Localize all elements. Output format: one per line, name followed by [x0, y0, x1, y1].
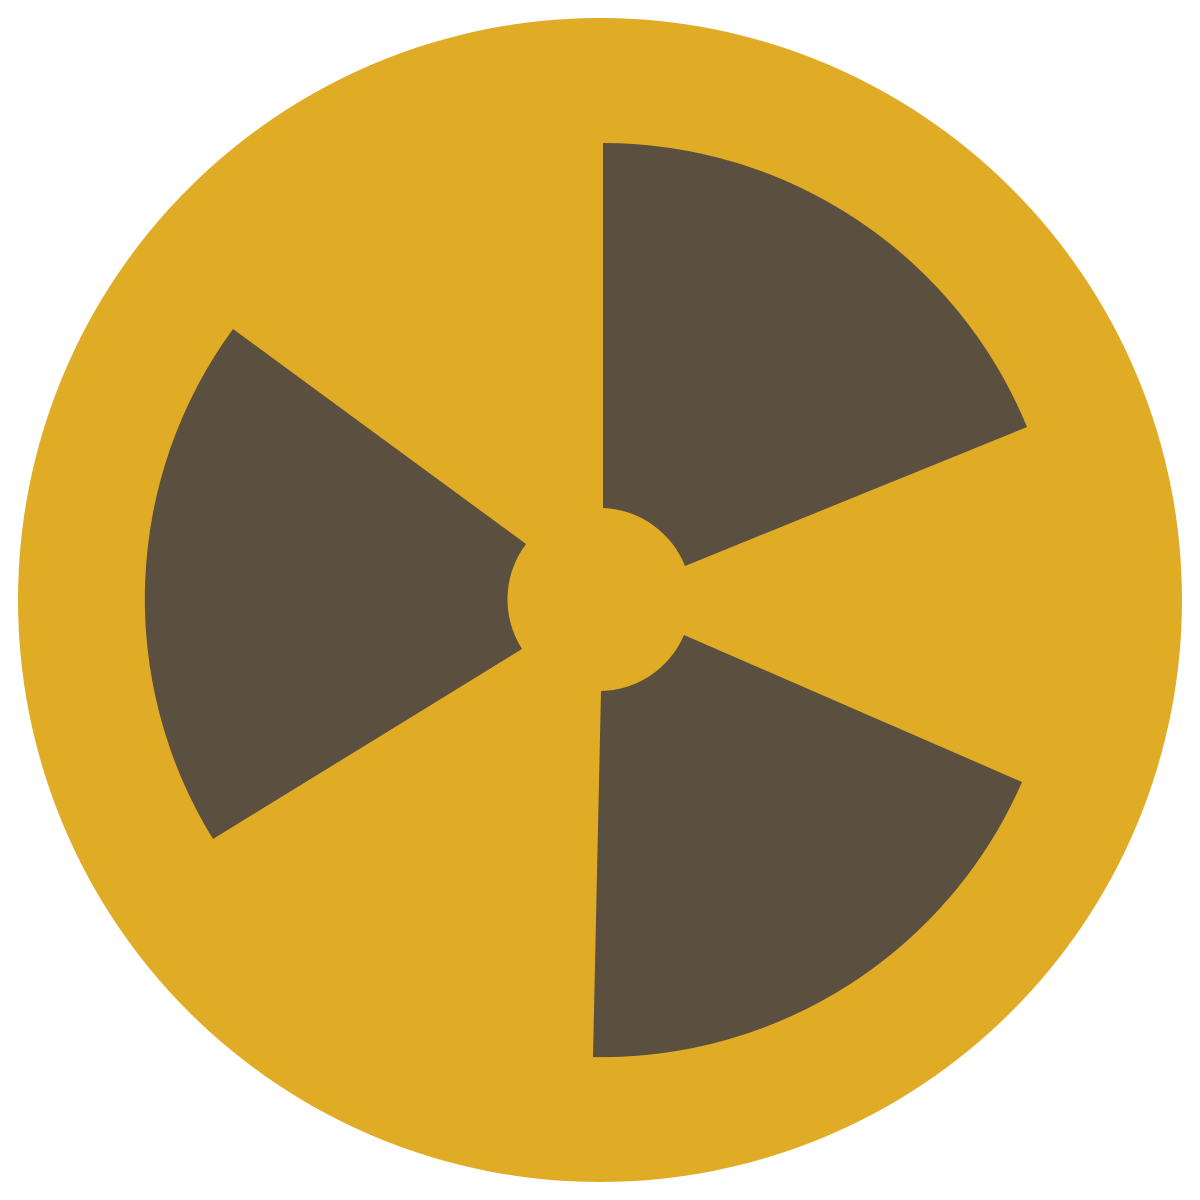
blade: top right	[603, 143, 1027, 566]
blade: left	[145, 329, 526, 839]
blade: bottom right	[593, 635, 1022, 1057]
